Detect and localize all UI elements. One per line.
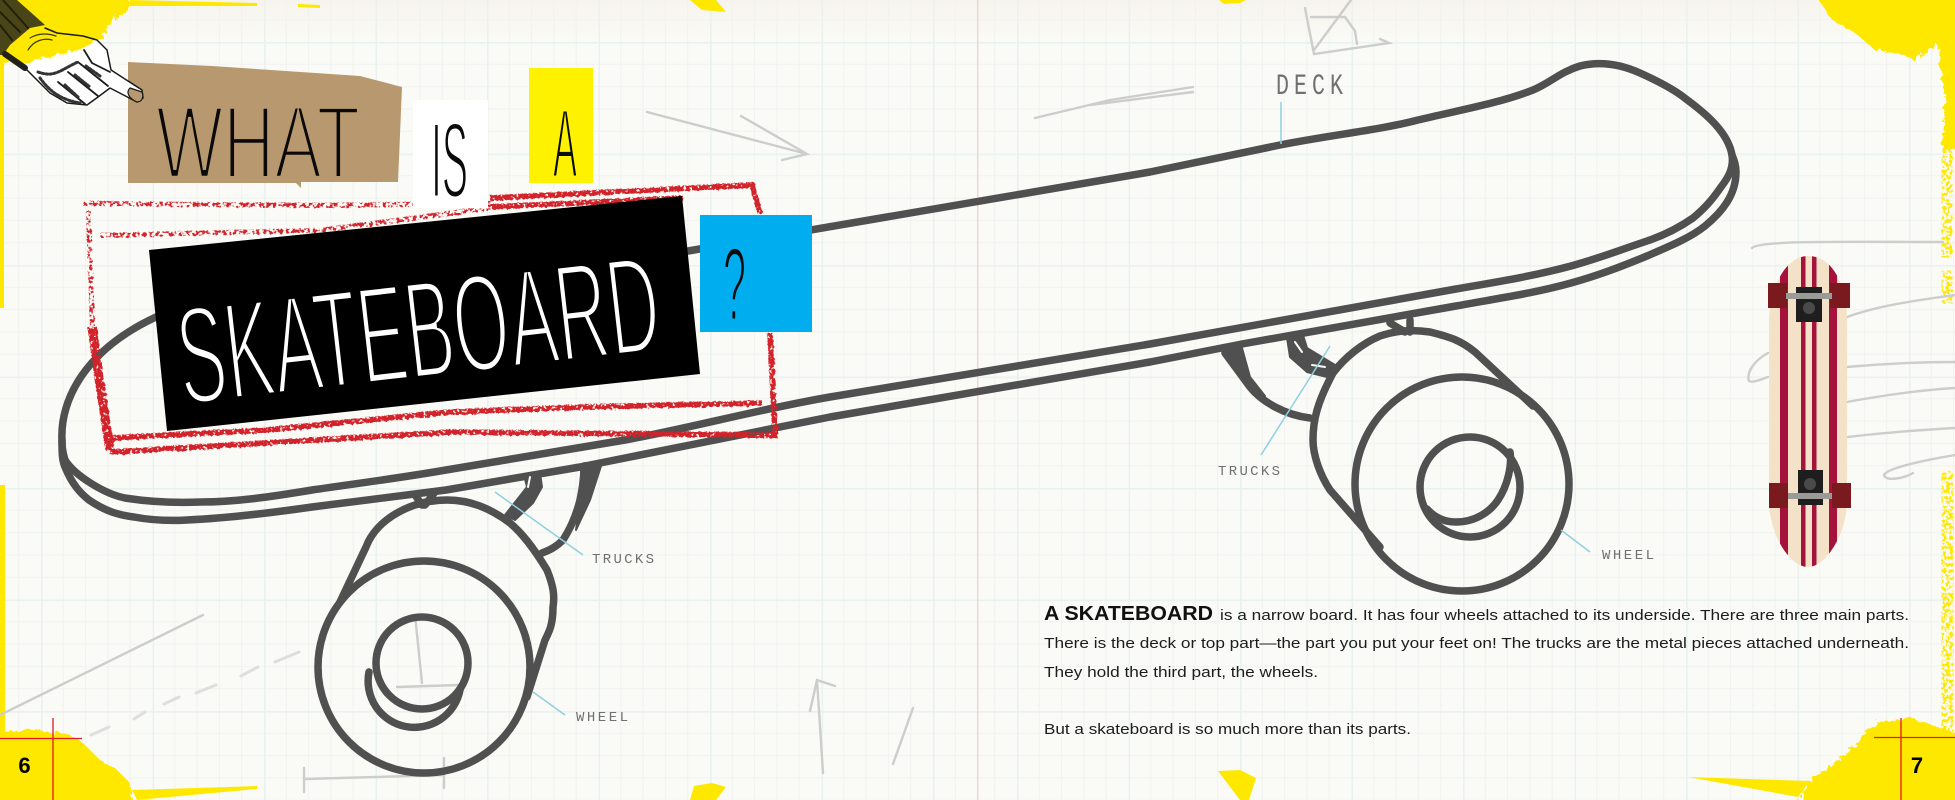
title word: SKATEBOARD on black paper (149, 196, 700, 435)
body text: They hold the third part, the wheels. (1044, 664, 1318, 681)
body text: But a skateboard is so much more than its parts. (1044, 721, 1411, 738)
deck outline (62, 64, 1736, 520)
page number 6 (0, 718, 82, 800)
mini deck stripes (1780, 250, 1837, 570)
right wheel and truck (1225, 320, 1569, 591)
page number 6: 6 (18, 753, 31, 778)
title word: A on yellow paper: A (553, 89, 577, 198)
label: deck: DECK (1276, 69, 1343, 103)
label: left wheel: WHEEL (576, 710, 628, 726)
red crayon rectangle (83, 185, 775, 452)
mini trucks and wheels (1768, 283, 1851, 508)
body text: There is the deck or top part—the part you put your feet on! The trucks are the metal pieces attached underneath. (1044, 635, 1909, 652)
page number 7 (1874, 718, 1955, 800)
body text: is a narrow board. It has four wheels attached to its underside. There are three main parts. (1220, 607, 1909, 624)
title word: IS on white paper: IS (431, 100, 468, 220)
label: deck (1276, 69, 1343, 144)
label: left trucks: TRUCKS (592, 552, 654, 568)
label: left wheel (533, 692, 628, 726)
label: right trucks: TRUCKS (1218, 464, 1280, 480)
title word: A on yellow paper (529, 68, 593, 198)
label: right wheel (1561, 530, 1654, 564)
page number 7: 7 (1911, 753, 1923, 778)
title (128, 62, 812, 435)
body text (1044, 603, 1909, 738)
title word: WHAT on kraft paper (128, 62, 402, 201)
title word: WHAT on kraft paper: WHAT (156, 85, 360, 201)
title word: question mark on blue paper: ? (723, 227, 746, 343)
part labels (495, 69, 1654, 726)
title word: IS on white paper (413, 100, 488, 220)
title word: question mark on blue paper (700, 215, 812, 343)
page marks and numbers (0, 718, 1955, 800)
small photo of skateboard (1768, 250, 1851, 570)
title word: SKATEBOARD on black paper: SKATEBOARD (169, 226, 668, 435)
label: right trucks (1218, 346, 1330, 480)
icon: pointing hand engraving (0, 0, 143, 105)
left wheel and truck (318, 463, 602, 773)
skateboard line drawing (62, 64, 1736, 773)
body text: A SKATEBOARD (1044, 603, 1213, 625)
mini deck (1769, 256, 1847, 567)
label: left trucks (495, 492, 654, 568)
label: right wheel: WHEEL (1602, 548, 1654, 564)
